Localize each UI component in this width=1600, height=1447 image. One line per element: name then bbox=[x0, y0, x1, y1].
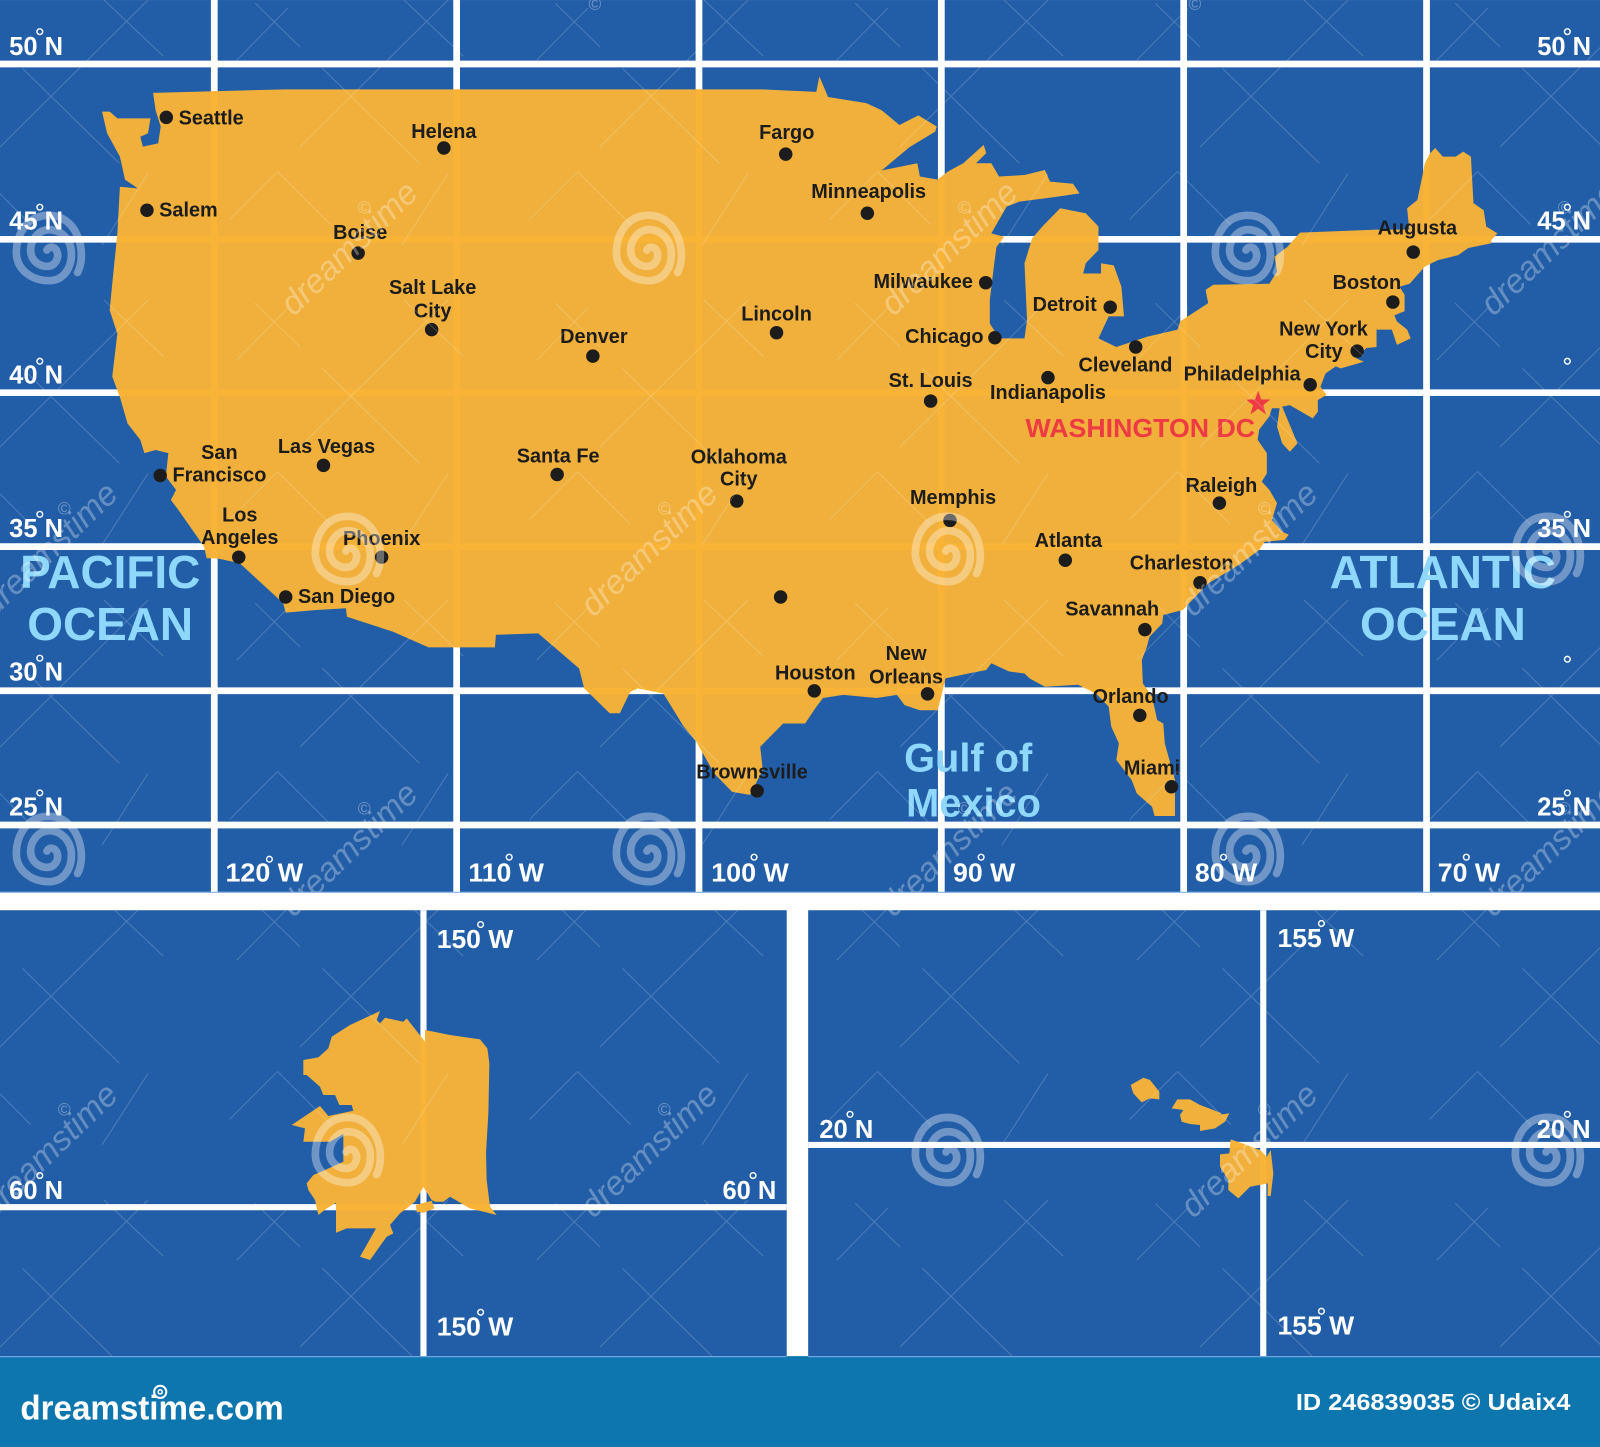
watermark: copyright marks: © bbox=[58, 498, 71, 518]
watermark: dreamstime diagonal text: dreamstime bbox=[874, 174, 1025, 323]
city labels: Los bbox=[222, 504, 257, 526]
watermark: copyright marks: © bbox=[958, 197, 971, 217]
longitude labels: 90 W bbox=[953, 860, 1016, 888]
Hawaii labels: 20 N bbox=[1537, 1116, 1591, 1144]
Hawaii labels: 155 W bbox=[1278, 1313, 1355, 1341]
Alaska labels: 60 N bbox=[722, 1177, 776, 1205]
longitude labels: 70 W bbox=[1438, 860, 1501, 888]
city labels: Phoenix bbox=[343, 528, 420, 550]
watermark: dreamstime diagonal text: dreamstime bbox=[274, 174, 425, 323]
land: contiguous states bbox=[102, 77, 1497, 816]
footer bar bbox=[0, 1356, 1600, 1447]
city dots bbox=[140, 111, 1420, 798]
watermark: copyright marks: © bbox=[358, 798, 371, 818]
latitude labels: 35 N bbox=[1537, 515, 1591, 543]
watermark: copyright marks: © bbox=[358, 197, 371, 217]
city labels: St. Louis bbox=[889, 370, 973, 392]
city labels: Brownsville bbox=[696, 762, 808, 784]
city labels: City bbox=[1305, 341, 1343, 363]
capital: Washington DC star and label: WASHINGTON DC bbox=[1026, 413, 1255, 443]
city labels: San Diego bbox=[298, 586, 395, 608]
city labels: Las Vegas bbox=[278, 436, 375, 458]
city labels: New York bbox=[1279, 319, 1369, 341]
latitude labels: 30 N bbox=[9, 659, 63, 687]
city labels: City bbox=[720, 469, 758, 491]
city labels: Orlando bbox=[1093, 686, 1169, 708]
watermark: copyright marks: © bbox=[58, 1099, 71, 1119]
latitude labels: 45 N bbox=[1537, 208, 1591, 236]
city labels: Memphis bbox=[910, 487, 996, 509]
watermark: copyright marks: © bbox=[958, 798, 971, 818]
watermark: dreamstime diagonal text: dreamstime bbox=[874, 775, 1025, 924]
city labels: Detroit bbox=[1033, 294, 1097, 316]
footer logo: dreamstime.com bbox=[20, 1389, 284, 1427]
watermark: spirals bbox=[16, 215, 1580, 1183]
latitude labels: 25 N bbox=[1537, 793, 1591, 821]
watermark: copyright marks: © bbox=[1558, 197, 1571, 217]
watermark: copyright marks: © bbox=[658, 498, 671, 518]
watermark: copyright marks: © bbox=[658, 1099, 671, 1119]
city labels: Milwaukee bbox=[873, 271, 973, 293]
ocean labels: Mexico bbox=[906, 781, 1041, 825]
latitude labels bbox=[9, 29, 1591, 821]
Alaska labels: 150 W bbox=[437, 1314, 514, 1342]
city labels: Indianapolis bbox=[990, 382, 1106, 404]
city labels: Orleans bbox=[869, 667, 943, 689]
city labels: Boston bbox=[1333, 272, 1401, 294]
city labels: Denver bbox=[560, 326, 628, 348]
city labels: City bbox=[414, 300, 451, 322]
ocean labels: PACIFIC bbox=[20, 546, 200, 598]
city labels: Minneapolis bbox=[811, 181, 926, 203]
footer image id: ID 246839035 © Udaix4 bbox=[1296, 1389, 1570, 1415]
city labels: Helena bbox=[411, 121, 477, 143]
latitude labels: 45 N bbox=[9, 208, 63, 236]
ocean labels bbox=[20, 546, 1556, 825]
city labels: Lincoln bbox=[741, 303, 812, 325]
city labels: Angeles bbox=[201, 527, 278, 549]
city labels: Augusta bbox=[1378, 218, 1458, 240]
panel: contiguous United States map bbox=[0, 0, 1600, 892]
city labels: Raleigh bbox=[1186, 475, 1257, 497]
latitude labels: 50 N bbox=[1537, 33, 1591, 61]
ocean labels: OCEAN bbox=[27, 598, 193, 650]
watermark: dreamstime diagonal text bbox=[0, 174, 1600, 1225]
city labels: Charleston bbox=[1130, 552, 1234, 574]
watermark: copyright marks: © bbox=[1258, 498, 1271, 518]
watermark: dreamstime diagonal text: dreamstime bbox=[574, 475, 725, 624]
Alaska labels: 60 N bbox=[9, 1177, 63, 1205]
Alaska labels: 150 W bbox=[437, 926, 514, 954]
ocean labels: Gulf of bbox=[904, 736, 1033, 780]
watermark: dreamstime diagonal text: dreamstime bbox=[274, 775, 425, 924]
land: Alaska bbox=[292, 1011, 497, 1260]
white band between main map and insets bbox=[0, 891, 1600, 893]
ocean labels: ATLANTIC bbox=[1330, 546, 1556, 598]
city labels bbox=[159, 108, 1458, 784]
capital: Washington DC star and label bbox=[1026, 391, 1270, 443]
panel: Hawaii inset bbox=[808, 910, 1600, 1356]
watermark: copyright marks bbox=[58, 0, 1571, 1119]
city labels: Chicago bbox=[905, 326, 984, 348]
latitude labels: 35 N bbox=[9, 515, 63, 543]
city labels: Houston bbox=[775, 663, 856, 685]
longitude labels: 120 W bbox=[226, 860, 304, 888]
ocean labels: OCEAN bbox=[1360, 598, 1526, 650]
latitude labels: 25 N bbox=[9, 793, 63, 821]
city labels: Seattle bbox=[179, 108, 244, 130]
city labels: San bbox=[201, 442, 238, 464]
watermark: dreamstime diagonal text: dreamstime bbox=[1174, 1076, 1325, 1225]
city labels: Philadelphia bbox=[1184, 364, 1302, 386]
city labels: Cleveland bbox=[1079, 354, 1172, 376]
Hawaii labels: 20 N bbox=[819, 1116, 873, 1144]
city labels: Fargo bbox=[759, 122, 814, 144]
city labels: Oklahoma bbox=[691, 446, 788, 468]
Hawaii labels: 155 W bbox=[1278, 925, 1355, 953]
city labels: Salt Lake bbox=[389, 277, 476, 299]
city labels: Savannah bbox=[1065, 598, 1159, 620]
watermark: dreamstime diagonal text: dreamstime bbox=[574, 1076, 725, 1225]
city labels: Atlanta bbox=[1035, 530, 1103, 552]
watermark: copyright marks: © bbox=[1558, 798, 1571, 818]
latitude labels: 50 N bbox=[9, 33, 63, 61]
city labels: New bbox=[886, 643, 927, 665]
city labels: Boise bbox=[333, 222, 387, 244]
longitude labels bbox=[226, 854, 1501, 888]
longitude labels: 80 W bbox=[1195, 860, 1258, 888]
Alaska labels bbox=[9, 922, 776, 1342]
watermark: copyright marks: © bbox=[1258, 1099, 1271, 1119]
city labels: Francisco bbox=[172, 465, 266, 487]
watermark: dreamstime diagonal text: dreamstime bbox=[1174, 475, 1325, 624]
longitude labels: 110 W bbox=[468, 860, 545, 888]
latitude labels: 40 N bbox=[9, 362, 63, 390]
land: Hawaii bbox=[1131, 1078, 1273, 1198]
panel: Alaska inset bbox=[0, 910, 787, 1356]
city labels: Santa Fe bbox=[517, 445, 600, 467]
Hawaii labels bbox=[819, 921, 1591, 1341]
longitude labels: 100 W bbox=[711, 860, 790, 888]
city labels: Miami bbox=[1124, 758, 1180, 780]
city labels: Salem bbox=[159, 199, 218, 221]
